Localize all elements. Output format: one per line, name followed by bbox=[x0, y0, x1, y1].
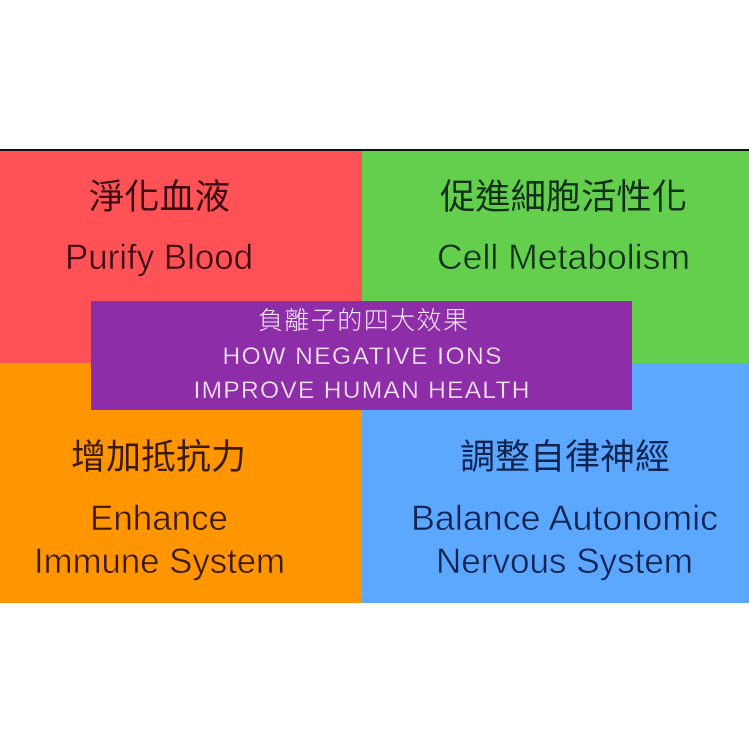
label: nervous system English: Balance Autonomic bbox=[411, 499, 718, 538]
heading: immune Chinese: 增加抵抗力 bbox=[71, 438, 246, 477]
label: immune English: Enhance bbox=[90, 499, 228, 538]
label: immune English bbox=[34, 499, 285, 581]
title English line 2: IMPROVE HUMAN HEALTH bbox=[194, 377, 530, 404]
label: immune English: Immune System bbox=[34, 542, 285, 581]
top border line bbox=[0, 149, 749, 151]
panel: purify blood bbox=[0, 150, 362, 363]
title Chinese: 負離子的四大效果 bbox=[258, 307, 468, 335]
label: purify blood English: Purify Blood bbox=[65, 238, 253, 277]
panel: balance autonomic nervous system bbox=[362, 363, 749, 603]
heading: nervous system Chinese: 調整自律神經 bbox=[460, 438, 670, 477]
label: nervous system English: Nervous System bbox=[436, 542, 693, 581]
panel: enhance immune system bbox=[0, 363, 362, 603]
label: cell metabolism English: Cell Metabolism bbox=[437, 238, 690, 277]
heading: purify blood Chinese: 淨化血液 bbox=[89, 178, 230, 217]
title English line 1: HOW NEGATIVE IONS bbox=[222, 343, 502, 370]
panel: central title bbox=[91, 301, 632, 410]
panel: cell metabolism bbox=[362, 150, 749, 363]
heading: cell metabolism Chinese: 促進細胞活性化 bbox=[440, 178, 687, 217]
label: nervous system English bbox=[411, 499, 718, 581]
